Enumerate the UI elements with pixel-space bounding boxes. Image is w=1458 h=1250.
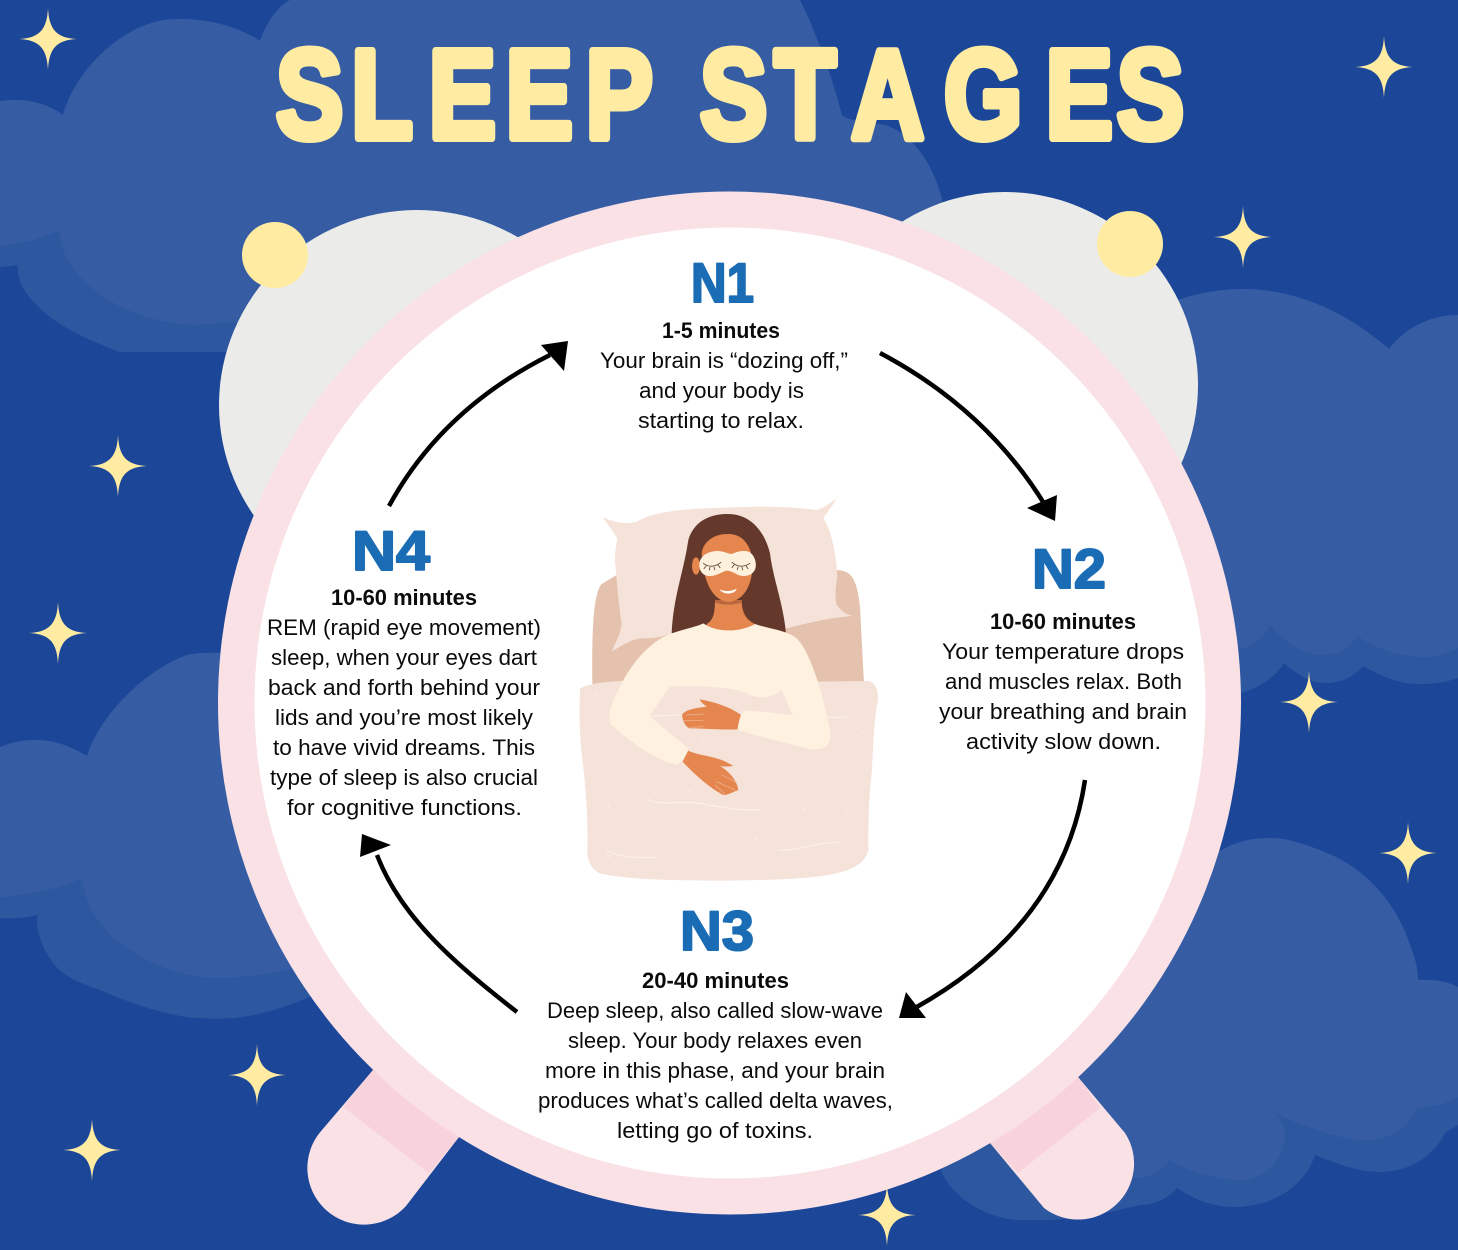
stage N4 text: 10-60 minutes: [331, 585, 477, 610]
lower hand: [683, 751, 738, 795]
stage N4 text: for cognitive functions.: [287, 795, 522, 820]
clouds: right: [1150, 289, 1458, 693]
stage N3 text: [538, 899, 893, 1143]
arrow: N2 to N3: [899, 780, 1085, 1018]
clock rim: [218, 192, 1241, 1214]
clock bell: right: [812, 192, 1198, 578]
stage N1 text: 1-5 minutes: [662, 318, 780, 343]
clock face: [254, 228, 1206, 1178]
blanket speckles: [595, 694, 865, 858]
sweater: [609, 623, 830, 764]
stage N2 text: Your temperature drops: [942, 639, 1184, 664]
stage N1 text: starting to relax.: [638, 408, 804, 433]
clock leg: left: [307, 1070, 459, 1225]
bell knob: right: [1097, 211, 1163, 277]
sleeping woman illustration: [580, 498, 878, 881]
neck shadow: [715, 600, 742, 605]
clock bell: left: [219, 210, 615, 600]
stage N3 text: Deep sleep, also called slow-wave: [547, 998, 883, 1023]
neck: [707, 600, 755, 638]
stage N4 text: N4: [352, 519, 430, 582]
smile: [719, 589, 737, 594]
stage N2 text: activity slow down.: [966, 729, 1161, 754]
arrow: N3 to N4: [360, 834, 517, 1012]
star: bottom: [858, 1184, 916, 1246]
stage N3 text: letting go of toxins.: [617, 1118, 813, 1143]
clock leg: right: [990, 1077, 1134, 1220]
stage N2 text: and muscles relax. Both: [945, 669, 1182, 694]
pillow: [603, 498, 853, 652]
title: SLEEP STAGES: [276, 25, 1184, 166]
stage N3 text: more in this phase, and your brain: [545, 1058, 885, 1083]
stage N4 text: [267, 519, 541, 820]
headboard: [592, 570, 864, 684]
face: [702, 534, 753, 602]
closed eyes: [703, 562, 750, 570]
sleep mask: [699, 551, 756, 576]
blanket folds: [607, 715, 847, 858]
stage N3 text: N3: [680, 899, 754, 962]
stage N2 text: [939, 537, 1187, 754]
bell knob: left: [242, 222, 308, 288]
stage N2 text: 10-60 minutes: [990, 609, 1136, 634]
stage N2 text: N2: [1032, 537, 1106, 600]
clouds: bottom right: [941, 838, 1458, 1220]
upper hand: [682, 699, 741, 729]
stage N3 text: 20-40 minutes: [642, 968, 789, 993]
arrow: N1 to N2: [880, 353, 1057, 521]
stage N3 text: produces what’s called delta waves,: [538, 1088, 893, 1113]
clouds: left middle: [0, 653, 320, 1019]
blanket: [580, 680, 878, 881]
arrow: N4 to N1: [389, 341, 568, 506]
stage N4 text: lids and you’re most likely: [275, 705, 533, 730]
alarm clock: [218, 192, 1241, 1225]
stage N4 text: type of sleep is also crucial: [270, 765, 538, 790]
ear: [692, 557, 700, 575]
stage N4 text: to have vivid dreams. This: [273, 735, 535, 760]
stage N2 text: your breathing and brain: [939, 699, 1187, 724]
stage N3 text: sleep. Your body relaxes even: [568, 1028, 862, 1053]
stage N4 text: sleep, when your eyes dart: [271, 645, 537, 670]
stage N1 text: Your brain is “dozing off,”: [600, 348, 848, 373]
stage N1 text: N1: [691, 251, 754, 314]
clouds: top left: [0, 0, 947, 400]
stage N4 text: back and forth behind your: [268, 675, 540, 700]
stage N4 text: REM (rapid eye movement): [267, 615, 541, 640]
hair: [672, 514, 786, 633]
stage N1 text: [600, 251, 848, 433]
stage N1 text: and your body is: [639, 378, 804, 403]
finger lines: [684, 714, 737, 794]
